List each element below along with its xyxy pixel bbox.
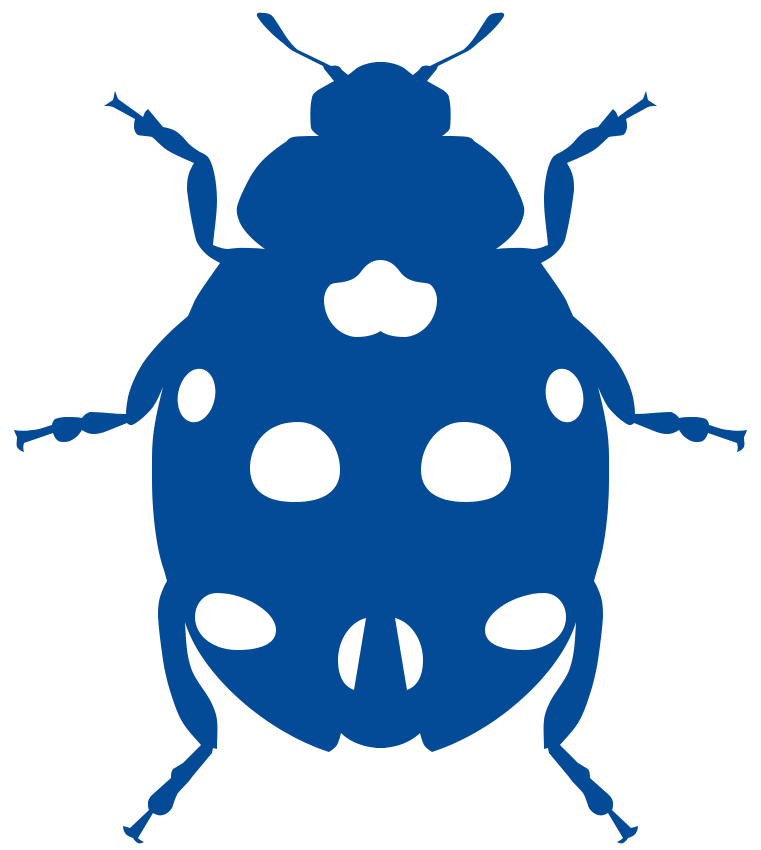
spot: upper left oval	[173, 365, 220, 426]
spot: bottom centre right	[395, 618, 423, 690]
white spots	[173, 260, 588, 690]
spot: middle right	[421, 422, 511, 502]
right half of body with antenna and legs	[376, 13, 747, 843]
spot: upper right oval	[541, 365, 588, 426]
spot: lower left	[195, 593, 276, 650]
spot: bottom centre left	[338, 618, 366, 690]
left half of body with antenna and legs	[14, 13, 385, 843]
spot: lower right	[485, 593, 566, 650]
spot: top centre trilobed	[324, 260, 437, 337]
spot: middle left	[250, 422, 340, 502]
